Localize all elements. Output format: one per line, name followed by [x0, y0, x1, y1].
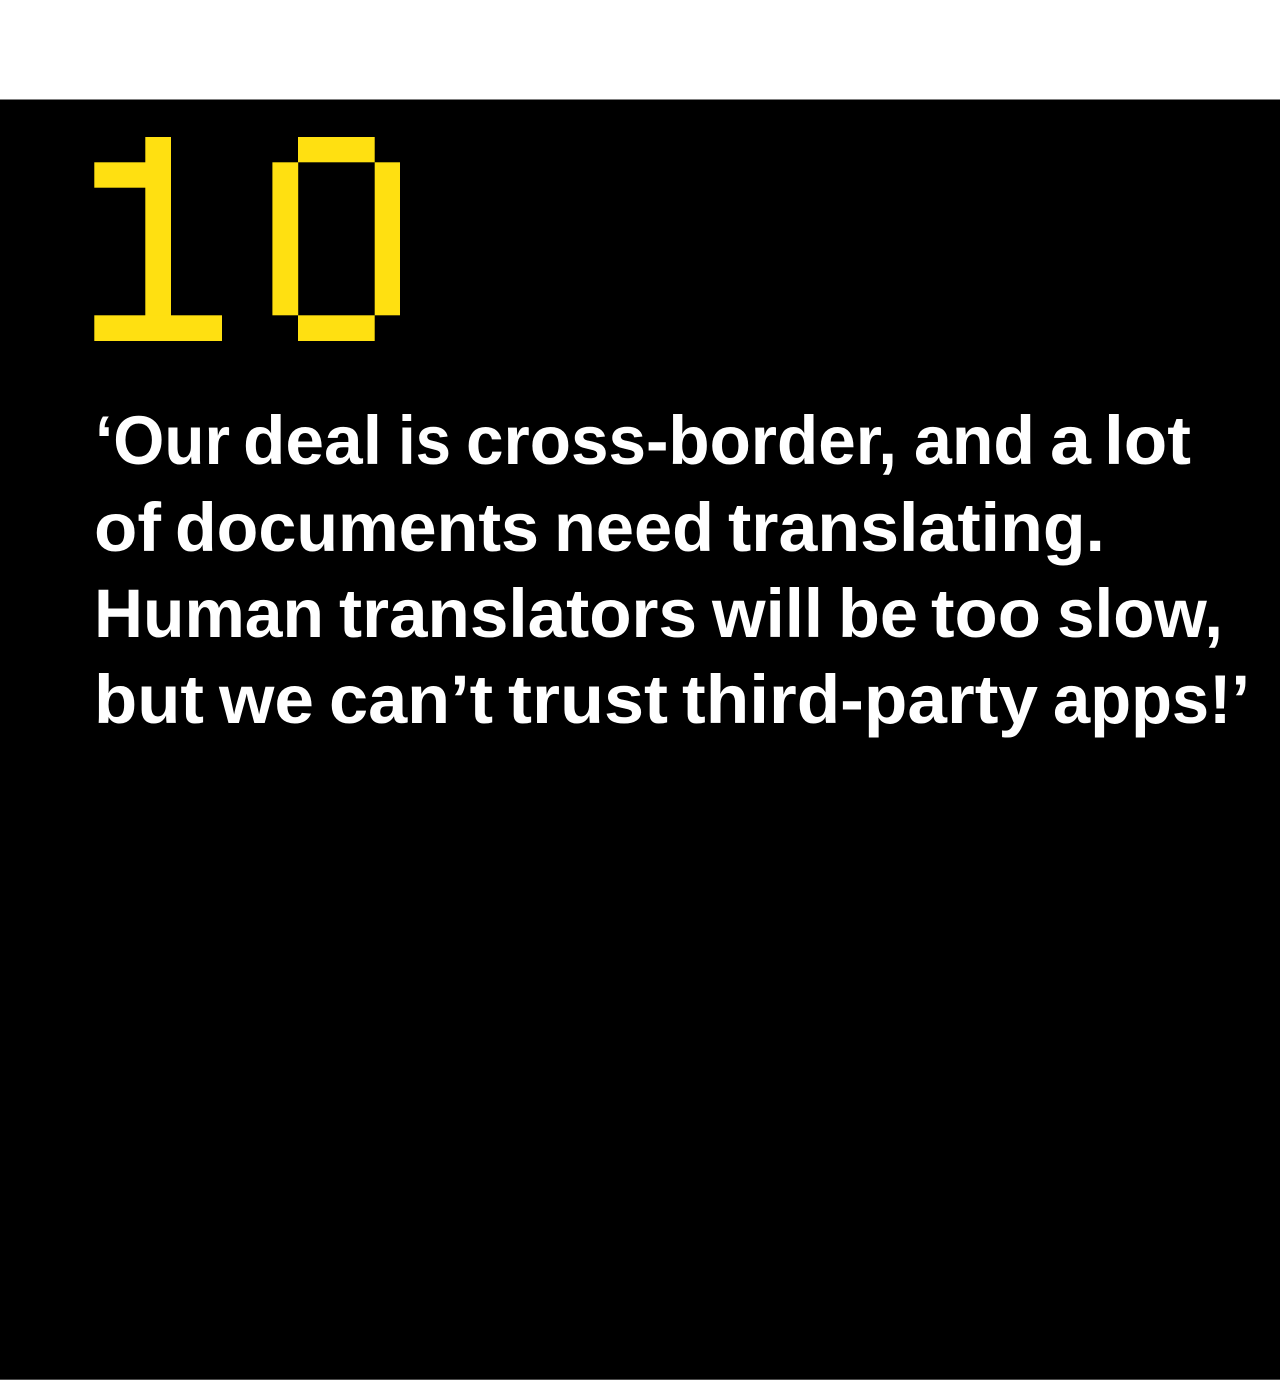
quote text: translating.	[728, 489, 1105, 566]
quote text: cross-border,	[466, 402, 897, 479]
quote text: can’t	[329, 661, 493, 738]
quote text: ‘Our	[95, 402, 230, 479]
quote text	[94, 402, 1250, 738]
quote text: a	[1050, 402, 1092, 479]
quote text: trust	[508, 661, 668, 738]
quote text: third-party	[682, 661, 1038, 738]
quote text: need	[554, 489, 714, 566]
quote text: is	[398, 402, 451, 479]
quote text: slow,	[1057, 575, 1223, 652]
quote text: but	[94, 661, 204, 738]
quote text: we	[218, 661, 314, 738]
quote text: translators	[339, 575, 697, 652]
quote text: deal	[243, 402, 382, 479]
quote text: and	[914, 402, 1035, 479]
quote text: be	[838, 575, 918, 652]
quote text: documents	[175, 489, 539, 566]
quote text: lot	[1104, 402, 1191, 479]
number 10 in pixel style	[94, 137, 400, 341]
quote text: will	[711, 575, 823, 652]
quote text: Human	[94, 575, 324, 652]
quote text: too	[931, 575, 1041, 652]
quote text: of	[94, 489, 162, 566]
quote text: apps!’	[1053, 661, 1250, 738]
